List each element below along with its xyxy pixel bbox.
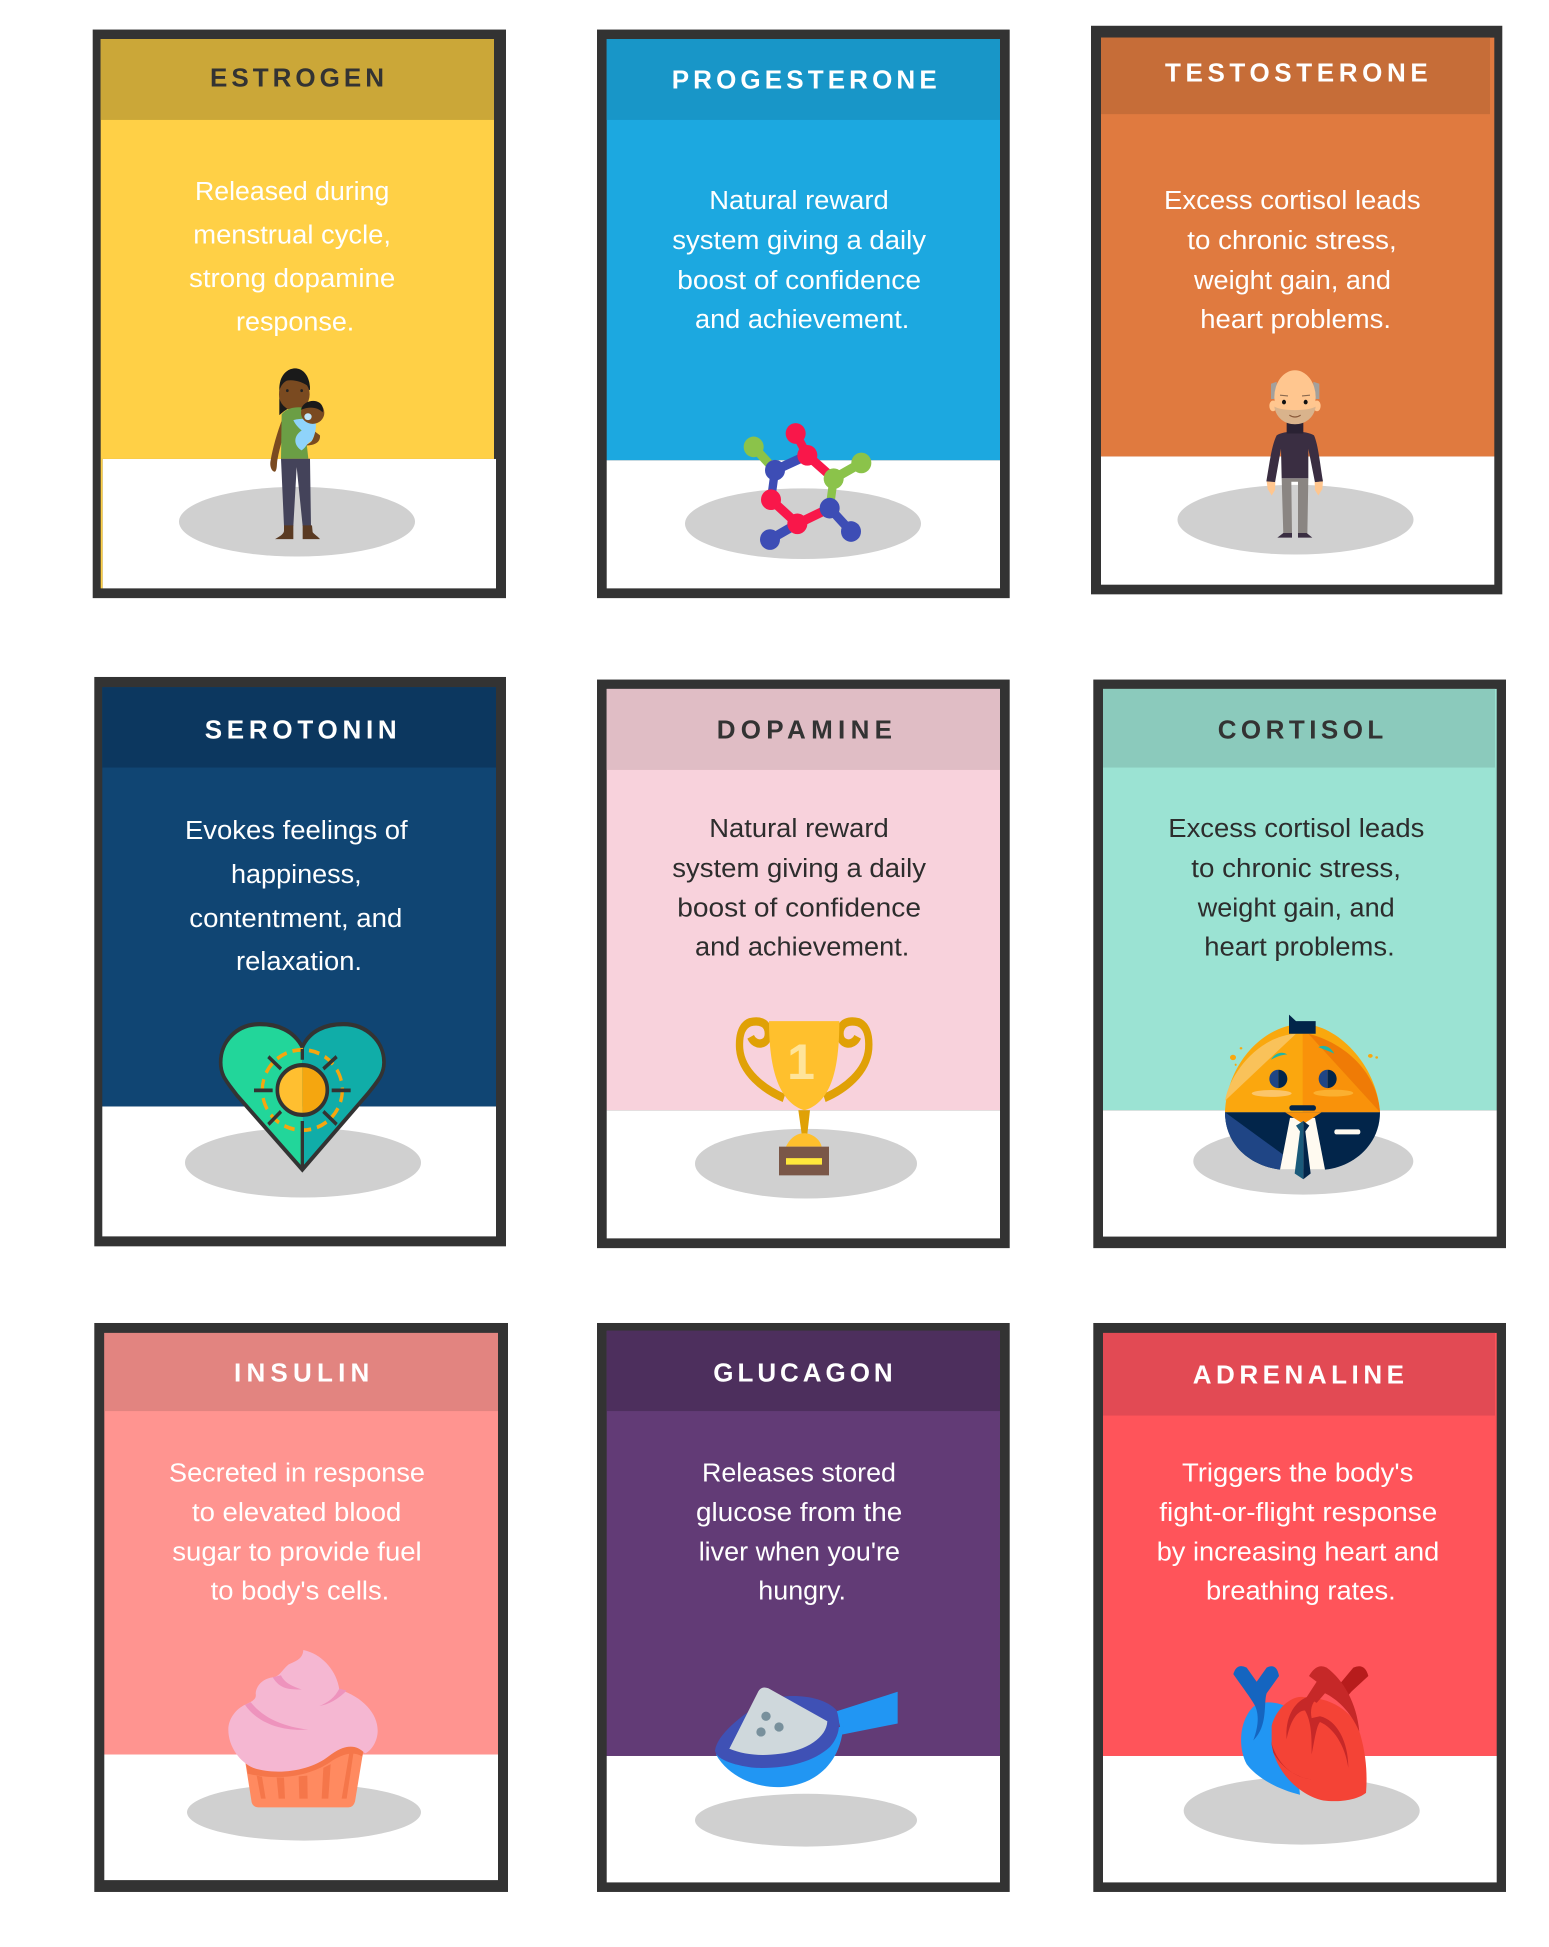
panel: serotonin (94, 677, 506, 1246)
text: glucagon description: liver when you're (699, 1538, 900, 1566)
text: testosterone description: weight gain, and (1193, 267, 1391, 295)
text: dopamine description: boost of confidence (677, 894, 921, 922)
text: dopamine description: Natural reward (709, 815, 889, 843)
panel: adrenaline (1093, 1323, 1506, 1892)
text: glucagon description (696, 1459, 902, 1606)
panel: progesterone (597, 30, 1010, 598)
heading: serotonin: SEROTONIN (205, 716, 397, 744)
text: insulin description: sugar to provide fuel (172, 1538, 422, 1566)
text: adrenaline description: Triggers the body's (1182, 1459, 1413, 1487)
text: cortisol description: weight gain, and (1197, 894, 1395, 922)
text: estrogen description: strong dopamine (189, 265, 395, 293)
icon: heart with sun (221, 1024, 384, 1170)
panel: estrogen (93, 30, 506, 598)
text: serotonin description: Evokes feelings of (185, 817, 409, 845)
text: cortisol description (1168, 815, 1424, 962)
text: estrogen description: response. (236, 309, 354, 337)
heading: glucagon: GLUCAGON (713, 1359, 893, 1387)
heading: dopamine: DOPAMINE (717, 716, 892, 744)
icon: trophy: 1 (787, 1034, 815, 1090)
text: insulin description: Secreted in response (169, 1459, 425, 1487)
heading: cortisol: CORTISOL (1218, 716, 1383, 744)
text: glucagon description: Releases stored (702, 1459, 896, 1487)
text: insulin description: to body's cells. (211, 1578, 389, 1606)
text: insulin description (169, 1459, 425, 1606)
text: serotonin description (185, 817, 409, 976)
text: adrenaline description (1157, 1459, 1439, 1606)
icon: cupcake (228, 1650, 378, 1807)
text: testosterone description (1164, 187, 1421, 334)
icon: bald man (1266, 370, 1323, 538)
text: dopamine description (672, 815, 926, 962)
text: insulin description: to elevated blood (192, 1499, 401, 1527)
icon: anatomical heart (1233, 1666, 1368, 1801)
text: serotonin description: relaxation. (236, 948, 362, 976)
text: progesterone description (672, 187, 926, 334)
text: serotonin description: happiness, (231, 861, 362, 889)
text: progesterone description: and achievement. (695, 306, 909, 334)
text: adrenaline description: fight-or-flight response (1159, 1499, 1437, 1527)
panel: cortisol (1093, 680, 1506, 1248)
text: estrogen description: menstrual cycle, (193, 222, 391, 249)
heading: estrogen: ESTROGEN (210, 65, 384, 93)
text: progesterone description: boost of confidence (677, 267, 921, 295)
text: progesterone description: Natural reward (709, 187, 889, 215)
text: testosterone description: Excess cortisol leads (1164, 187, 1421, 215)
text: testosterone description: to chronic stress, (1187, 227, 1397, 255)
panel: dopamine (597, 680, 1010, 1248)
text: cortisol description: heart problems. (1204, 934, 1395, 962)
icon: trophy (740, 1021, 869, 1175)
text: estrogen description: Released during (195, 178, 389, 206)
text: progesterone description: system giving a daily (672, 227, 926, 255)
text: cortisol description: to chronic stress, (1191, 855, 1401, 883)
icon: molecule (744, 423, 871, 550)
heading: insulin: INSULIN (234, 1359, 369, 1387)
icon: stressed face in suit (1225, 1015, 1380, 1179)
text: dopamine description: and achievement. (695, 934, 909, 962)
icon: mother holding baby (270, 368, 324, 539)
icon: scoop of sugar (715, 1687, 898, 1787)
text: adrenaline description: by increasing heart and (1157, 1538, 1439, 1566)
text: adrenaline description: breathing rates. (1206, 1578, 1396, 1606)
text: serotonin description: contentment, and (189, 905, 402, 933)
panel: testosterone (1091, 26, 1502, 594)
panel: insulin (94, 1323, 508, 1892)
text: glucagon description: glucose from the (696, 1499, 902, 1527)
text: estrogen description (189, 178, 395, 337)
text: testosterone description: heart problems. (1200, 306, 1391, 334)
text: cortisol description: Excess cortisol leads (1168, 815, 1424, 843)
heading: progesterone: PROGESTERONE (672, 66, 937, 94)
text: glucagon description: hungry. (758, 1578, 846, 1606)
text: dopamine description: system giving a daily (672, 855, 926, 883)
heading: adrenaline: ADRENALINE (1193, 1362, 1404, 1390)
heading: testosterone: TESTOSTERONE (1165, 60, 1428, 88)
panel: glucagon (597, 1323, 1010, 1892)
